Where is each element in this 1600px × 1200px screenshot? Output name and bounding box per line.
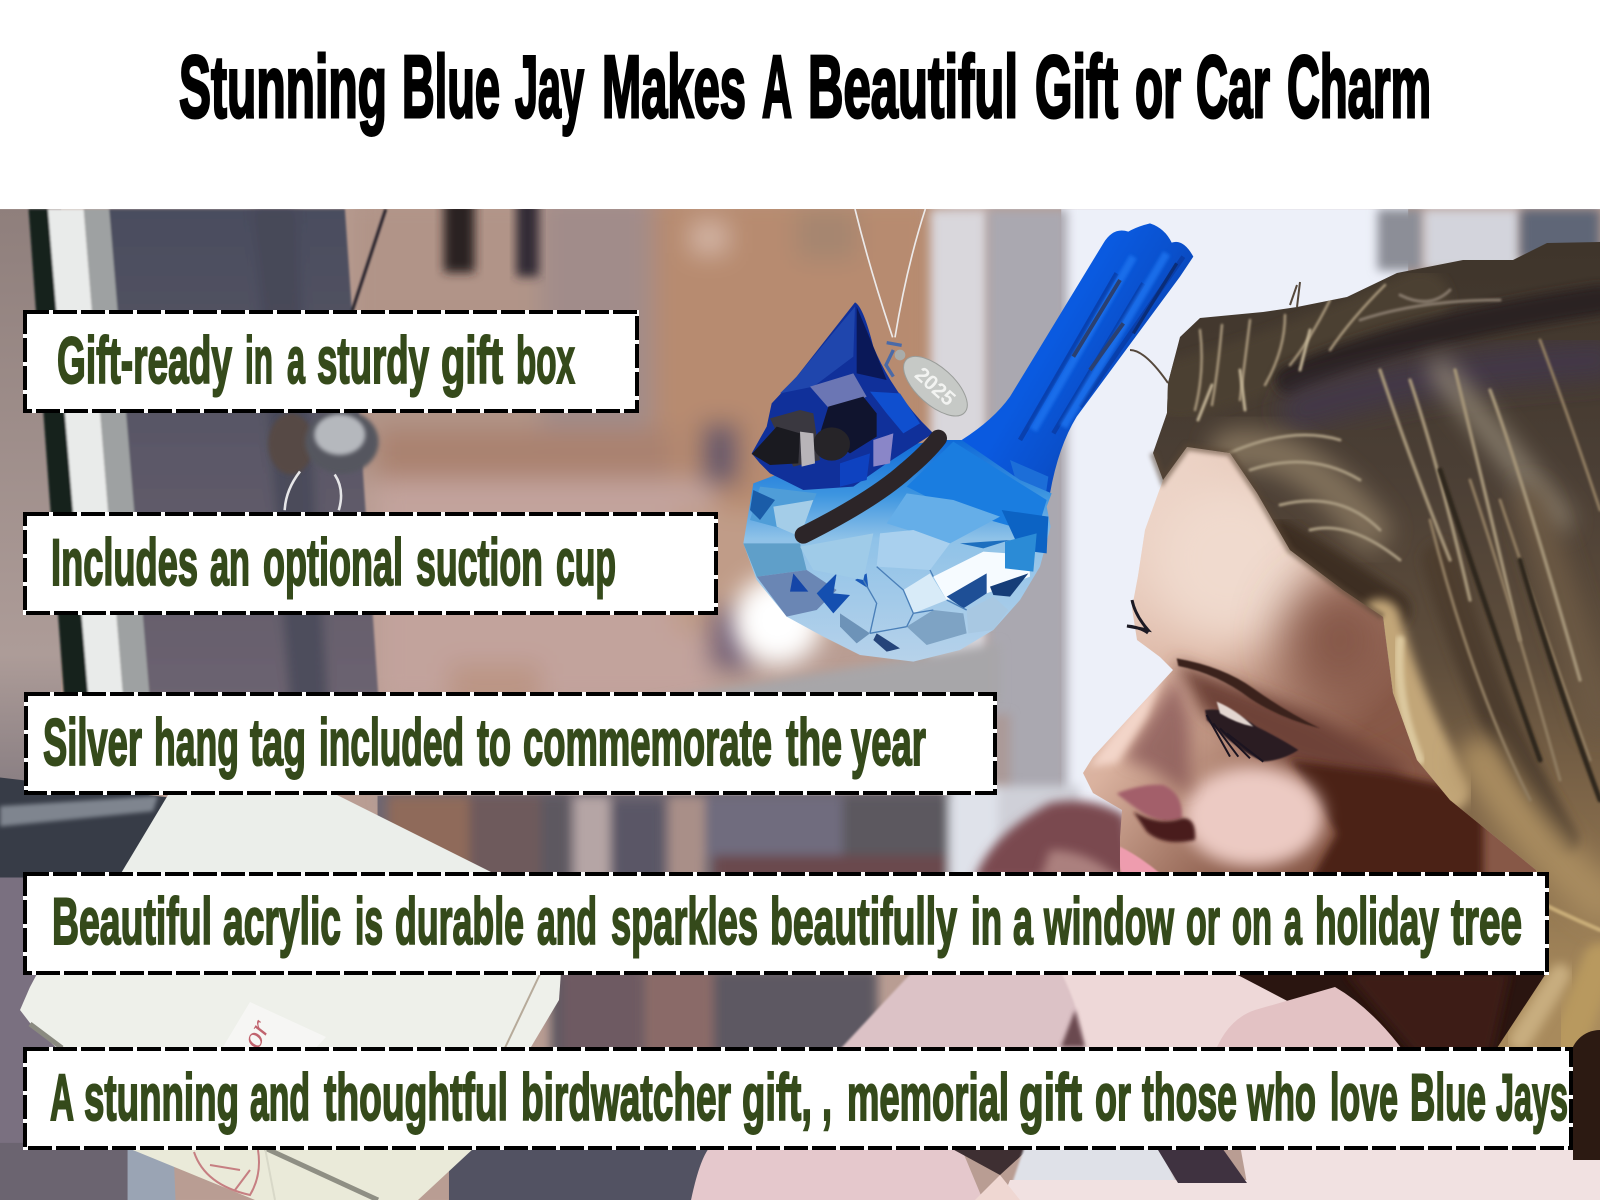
woman bbox=[690, 230, 1600, 1200]
feature: gift box: in bbox=[245, 323, 273, 397]
feature: birdwatcher gift: who bbox=[1246, 1060, 1316, 1134]
title: Blue bbox=[402, 37, 500, 136]
title: Car bbox=[1196, 37, 1270, 136]
feature: silver hang tag: the bbox=[786, 705, 842, 779]
title: A bbox=[762, 37, 792, 136]
soft hairline bbox=[1153, 447, 1383, 617]
feature: silver hang tag: to bbox=[477, 705, 511, 779]
tail bbox=[962, 223, 1193, 500]
title: Charm bbox=[1287, 37, 1431, 136]
feature: gift box: box bbox=[516, 323, 575, 397]
feature: beautiful acrylic: on bbox=[1232, 884, 1272, 958]
feature: birdwatcher gift: gift bbox=[1019, 1060, 1082, 1134]
feature: beautiful acrylic: in bbox=[971, 884, 1002, 958]
feature: silver hang tag: included bbox=[319, 705, 464, 779]
feature: beautiful acrylic: tree bbox=[1451, 884, 1522, 958]
body bbox=[743, 440, 1052, 662]
feature: birdwatcher gift: love bbox=[1330, 1060, 1398, 1134]
face bbox=[1083, 447, 1536, 872]
eyelash of far eye bbox=[1127, 600, 1148, 633]
feature: silver hang tag: commemorate bbox=[523, 705, 772, 779]
window frame bbox=[29, 209, 386, 714]
feature: suction cup bbox=[25, 514, 716, 613]
feature: beautiful acrylic: durable bbox=[395, 884, 524, 958]
feature: birdwatcher gift: thoughtful bbox=[324, 1060, 508, 1134]
suction cup bbox=[268, 410, 379, 510]
feature: gift box: a bbox=[287, 323, 306, 397]
title: Beautiful bbox=[808, 37, 1018, 136]
title: or bbox=[1135, 37, 1181, 136]
feature: beautiful acrylic: is bbox=[355, 884, 383, 958]
black collar bbox=[803, 438, 938, 535]
feature: beautiful acrylic: and bbox=[537, 884, 597, 958]
feature: birdwatcher gift: A bbox=[50, 1060, 74, 1134]
blue jay ornament bbox=[743, 209, 1193, 662]
feature: beautiful acrylic: Beautiful bbox=[52, 884, 212, 958]
feature: birdwatcher gift: birdwatcher bbox=[521, 1060, 731, 1134]
feature: silver hang tag: tag bbox=[250, 705, 306, 779]
title: Makes bbox=[602, 37, 746, 136]
feature: gift box: sturdy bbox=[317, 323, 429, 397]
lower background bbox=[0, 778, 1080, 1200]
feature: birdwatcher gift: Blue bbox=[1410, 1060, 1486, 1134]
feature: beautiful acrylic: a bbox=[1284, 884, 1303, 958]
feature: beautiful acrylic: acrylic bbox=[223, 884, 341, 958]
feature: suction cup: cup bbox=[556, 525, 616, 599]
feature: gift box: gift bbox=[441, 323, 503, 397]
feature: beautiful acrylic bbox=[25, 874, 1547, 973]
feature: birdwatcher gift: stunning bbox=[84, 1060, 239, 1134]
feature: gift box bbox=[25, 312, 637, 411]
feature: suction cup: Includes bbox=[51, 525, 198, 599]
feature: beautiful acrylic: holiday bbox=[1315, 884, 1439, 958]
silver tag with year: 2025 bbox=[910, 363, 960, 411]
feature: beautiful acrylic: window bbox=[1043, 884, 1174, 958]
bright window bbox=[931, 209, 1600, 883]
title bbox=[179, 37, 1431, 136]
face details bbox=[1090, 658, 1483, 893]
feature: birdwatcher gift: memorial bbox=[847, 1060, 1009, 1134]
gift box bbox=[20, 795, 561, 1200]
feature: birdwatcher gift: or bbox=[1095, 1060, 1131, 1134]
feature: birdwatcher gift: , bbox=[822, 1060, 832, 1134]
feature: birdwatcher gift bbox=[25, 1049, 1571, 1148]
title: Gift bbox=[1035, 37, 1118, 136]
feature: birdwatcher gift: gift, bbox=[742, 1060, 812, 1134]
hanging string bbox=[855, 209, 925, 377]
feature: suction cup: optional bbox=[263, 525, 403, 599]
silver tag with year bbox=[894, 346, 977, 426]
gift box: or bbox=[235, 1014, 277, 1053]
head and crest bbox=[752, 302, 933, 490]
feature: silver hang tag: year bbox=[851, 705, 926, 779]
stray hair bbox=[1130, 282, 1300, 383]
feature: suction cup: suction bbox=[416, 525, 543, 599]
feature: beautiful acrylic: beautifully bbox=[770, 884, 957, 958]
feature: beautiful acrylic: a bbox=[1013, 884, 1034, 958]
title: Stunning bbox=[179, 37, 387, 136]
feature: silver hang tag: hang bbox=[154, 705, 239, 779]
feature: gift box: Gift-ready bbox=[57, 323, 232, 397]
feature: birdwatcher gift: those bbox=[1142, 1060, 1237, 1134]
sweater bbox=[690, 972, 1600, 1200]
hair bbox=[1140, 230, 1600, 1200]
feature: birdwatcher gift: and bbox=[250, 1060, 310, 1134]
feature: suction cup: an bbox=[210, 525, 250, 599]
feature: beautiful acrylic: sparkles bbox=[611, 884, 758, 958]
feature: silver hang tag bbox=[26, 694, 995, 793]
hand and arm bbox=[830, 801, 1310, 1060]
feature: silver hang tag: Silver bbox=[43, 705, 142, 779]
feature: beautiful acrylic: or bbox=[1186, 884, 1220, 958]
title: Jay bbox=[515, 37, 584, 136]
